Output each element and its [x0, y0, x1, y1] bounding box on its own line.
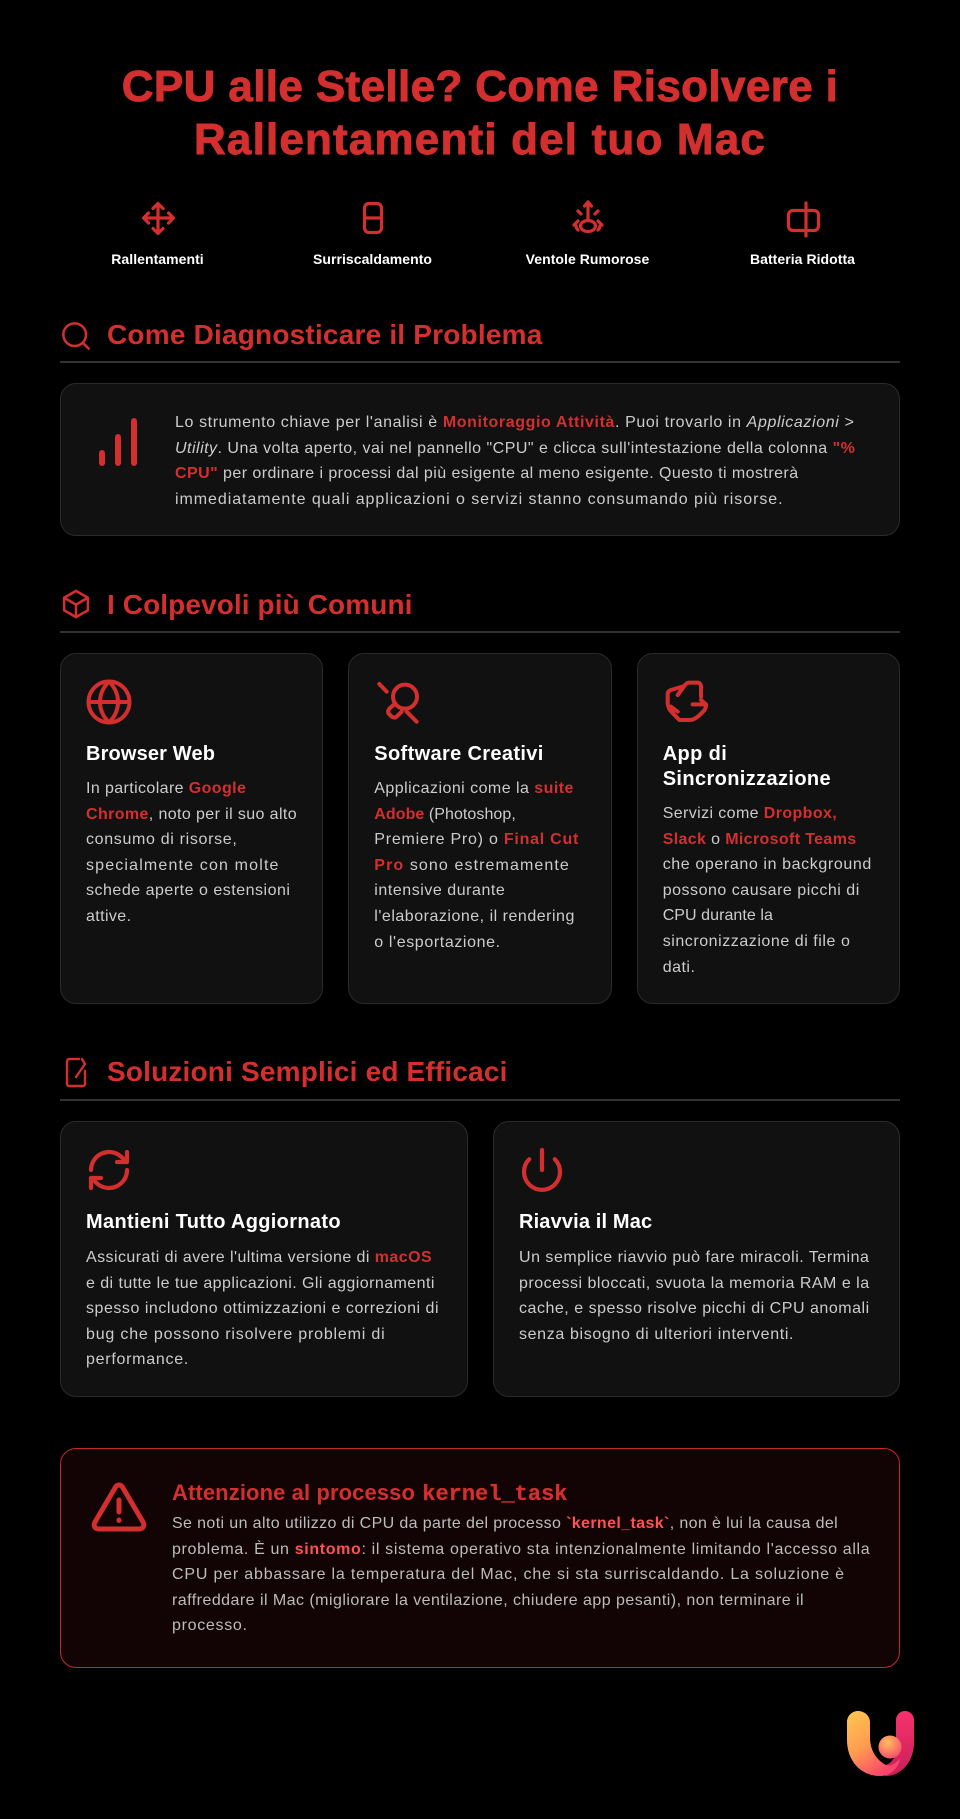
- heading text: Soluzioni Semplici ed Efficaci: [107, 1056, 508, 1087]
- card text: CPU durante la: [663, 907, 773, 924]
- callout text: [172, 1515, 870, 1634]
- icon: globe: [86, 679, 132, 725]
- icon: cube: [62, 590, 90, 618]
- icon: arrows: [142, 202, 176, 236]
- icon: battery: [786, 201, 820, 238]
- card title: App di: [663, 743, 727, 765]
- card text: Slack o Microsoft Teams: [663, 831, 857, 848]
- symptom: Ventole Rumorose: [526, 200, 649, 267]
- text block: immediatamente quali applicazioni o servizi stanno consumando più risorse.: [175, 491, 784, 508]
- card text: Applicazioni come la suite: [374, 780, 574, 797]
- title: CPU alle Stelle? Come Risolvere i: [122, 62, 838, 111]
- card text: e di tutte le tue applicazioni. Gli aggiornamenti: [86, 1275, 435, 1292]
- card text: Pro sono estremamente: [374, 857, 570, 874]
- card text: possono causare picchi di: [663, 882, 860, 899]
- title: [122, 62, 838, 164]
- card text: schede aperte o estensioni: [86, 882, 291, 899]
- card title: Mantieni Tutto Aggiornato: [86, 1211, 341, 1233]
- card text: che operano in background: [663, 856, 872, 873]
- symptom: Surriscaldamento: [313, 202, 432, 267]
- icon: search: [62, 322, 90, 350]
- title: Rallentamenti del tuo Mac: [194, 115, 766, 164]
- card text: dati.: [663, 959, 695, 976]
- card text: [86, 1249, 439, 1368]
- panel: diagnosi: [60, 383, 900, 536]
- card text: processi bloccati, svuota la memoria RAM e la: [519, 1275, 870, 1292]
- text block: Lo strumento chiave per l'analisi è Monitoraggio Attività. Puoi trovarlo in Applicazioni >: [175, 414, 854, 431]
- label: Surriscaldamento: [313, 251, 432, 267]
- card text: Assicurati di avere l'ultima versione di macOS: [86, 1249, 432, 1266]
- card text: Adobe (Photoshop,: [374, 806, 516, 823]
- icon: refresh: [88, 1150, 130, 1190]
- label: Rallentamenti: [111, 251, 204, 267]
- card text: l'elaborazione, il rendering: [374, 908, 575, 925]
- icon: fan: [572, 200, 604, 234]
- icon: brush: [377, 682, 419, 724]
- card title: [663, 743, 831, 790]
- card title: Software Creativi: [374, 743, 544, 765]
- card title: Riavvia il Mac: [519, 1211, 652, 1233]
- card text: sincronizzazione di file o: [663, 933, 850, 950]
- section heading: colpevoli: [60, 589, 900, 633]
- card text: Premiere Pro) o Final Cut: [374, 831, 579, 848]
- card: Browser Web: [60, 653, 323, 1004]
- text block: CPU" per ordinare i processi dal più esigente al meno esigente. Questo ti mostrerà: [175, 465, 799, 482]
- label: Ventole Rumorose: [526, 251, 649, 267]
- text block: Utility. Una volta aperto, vai nel pannello "CPU" e clicca sull'intestazione della colonna "%: [175, 440, 855, 457]
- icon: warning: [92, 1482, 146, 1532]
- card: Riavvia il Mac: [493, 1121, 900, 1397]
- card text: Servizi come Dropbox,: [663, 805, 837, 822]
- card text: o l'esportazione.: [374, 934, 501, 951]
- card text: In particolare Google: [86, 780, 246, 797]
- card: App di Sincronizzazione: [637, 653, 900, 1004]
- card text: [374, 780, 579, 951]
- callout: kernel_task: [60, 1448, 900, 1668]
- callout text: CPU per abbassare la temperatura del Mac, che si sta surriscaldando. La soluzione è: [172, 1566, 845, 1583]
- card: Software Creativi: [348, 653, 612, 1004]
- callout text: problema. È un sintomo: il sistema operativo sta intenzionalmente limitando l'accesso alla: [172, 1541, 870, 1558]
- card text: Un semplice riavvio può fare miracoli. Termina: [519, 1249, 869, 1266]
- label: Batteria Ridotta: [750, 251, 855, 267]
- callout title: Attenzione al processo kernel_task: [172, 1480, 567, 1507]
- symptom: Rallentamenti: [111, 202, 204, 267]
- callout text: processo.: [172, 1617, 248, 1634]
- card text: [663, 805, 872, 976]
- icon: power: [522, 1148, 562, 1192]
- callout text: Se noti un alto utilizzo di CPU da parte del processo `kernel_task`, non è lui la causa del: [172, 1515, 838, 1532]
- callout text: raffreddare il Mac (migliorare la ventilazione, chiudere app pesanti), non terminare il: [172, 1592, 804, 1609]
- card text: attive.: [86, 908, 131, 925]
- card: Mantieni Tutto Aggiornato: [60, 1121, 468, 1397]
- section heading: diagnosi: [60, 319, 900, 363]
- icon: sync cloud: [666, 680, 708, 722]
- card text: bug che possono risolvere problemi di: [86, 1326, 385, 1343]
- card title: Sincronizzazione: [663, 768, 831, 790]
- icon: bars: [99, 418, 137, 466]
- card text: intensive durante: [374, 882, 505, 899]
- icon: file edit: [66, 1058, 86, 1088]
- heading text: Come Diagnosticare il Problema: [107, 319, 542, 350]
- icon: split capsule: [362, 202, 384, 234]
- card title: Browser Web: [86, 743, 215, 765]
- card text: [519, 1249, 870, 1343]
- card text: cache, e spesso risolve picchi di CPU anomali: [519, 1300, 870, 1317]
- card text: [86, 780, 297, 925]
- card text: spesso includono ottimizzazioni e correzioni di: [86, 1300, 439, 1317]
- symptom: Batteria Ridotta: [750, 201, 855, 267]
- section heading: soluzioni: [60, 1056, 900, 1101]
- heading text: I Colpevoli più Comuni: [107, 589, 413, 620]
- card text: Chrome, noto per il suo alto: [86, 806, 297, 823]
- card text: senza bisogno di ulteriori interventi.: [519, 1326, 794, 1343]
- card text: specialmente con molte: [86, 857, 280, 874]
- card text: consumo di risorse,: [86, 831, 237, 848]
- logo: [847, 1711, 914, 1776]
- text block: [175, 414, 855, 508]
- card text: performance.: [86, 1351, 189, 1368]
